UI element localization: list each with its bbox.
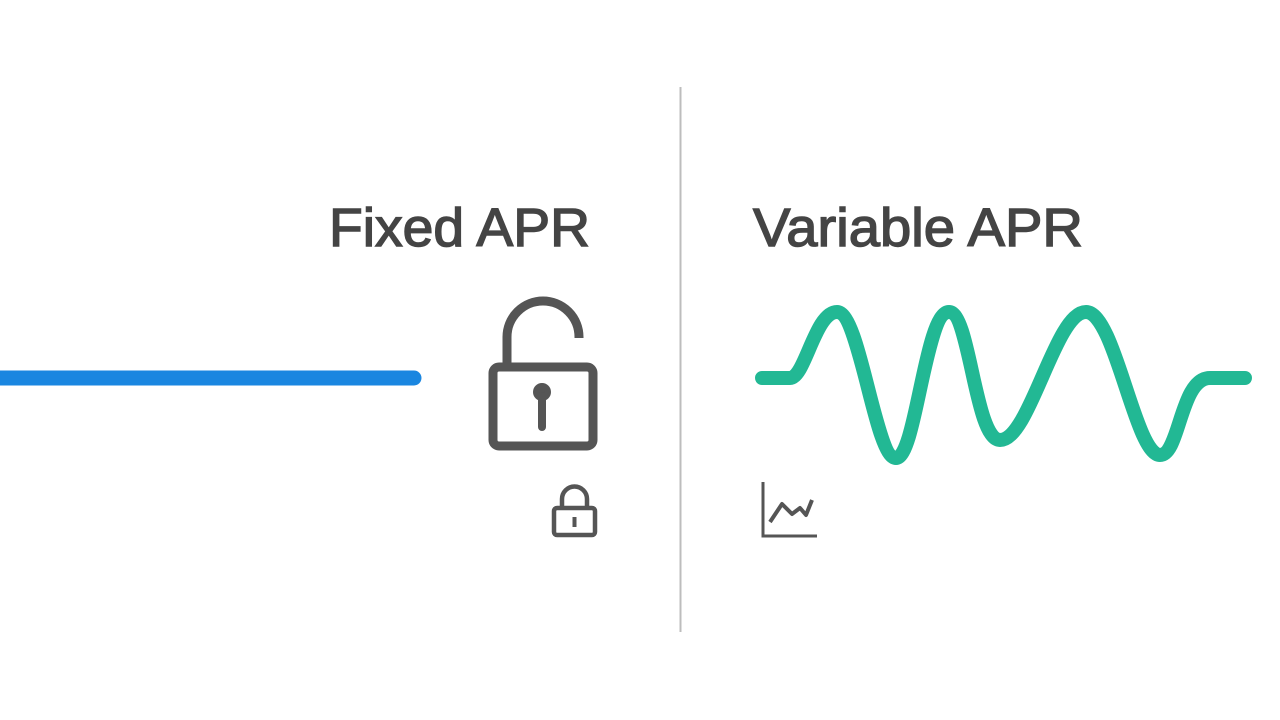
- panel: variable APR: [753, 198, 1245, 536]
- icon: small closed padlock: [554, 486, 595, 535]
- fluctuating rate wave: [762, 312, 1245, 458]
- heading: Fixed APR: Fixed APR: [329, 198, 590, 258]
- heading: Variable APR: Variable APR: [753, 198, 1083, 258]
- icon: open padlock: [493, 301, 593, 446]
- icon: line chart: [763, 482, 817, 536]
- panel: fixed APR: [0, 198, 595, 535]
- flat rate line: [0, 370, 414, 386]
